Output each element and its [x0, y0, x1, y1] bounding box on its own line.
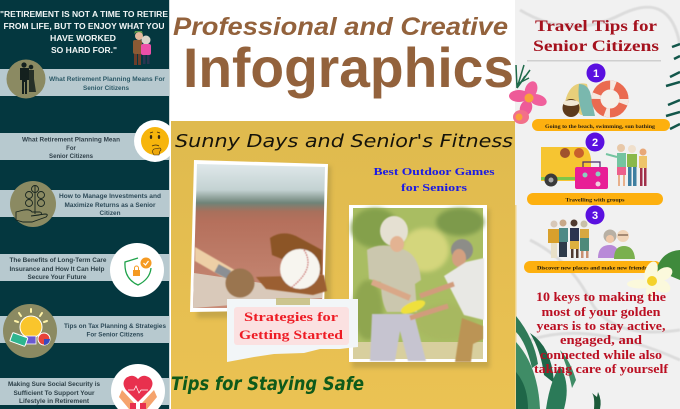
quote heading	[0, 9, 168, 55]
text block: golden years: most of your golden	[542, 305, 661, 319]
icon: heart in hands	[111, 364, 165, 409]
band 2	[0, 133, 169, 160]
text block: golden years: taking care of yourself	[534, 362, 669, 376]
panel: seniors fitness	[171, 121, 515, 409]
band 4	[0, 254, 169, 281]
callout: strategies	[227, 298, 358, 362]
callout: strategies: Strategies for	[244, 310, 339, 324]
band 1: What Retirement Planning Means For	[49, 77, 166, 83]
heading: sunny days: Sunny Days and Senior's Fitness	[175, 131, 513, 152]
text block: golden years: years is to stay active,	[536, 319, 666, 333]
step 2 badge: 2	[592, 137, 598, 149]
heading: travel tips: Travel Tips for	[535, 18, 657, 35]
flower left	[509, 65, 548, 124]
band 2: Senior Citizens	[49, 154, 94, 160]
step 2 badge	[586, 132, 604, 152]
icon: plumeria and leaf	[627, 250, 680, 299]
step 1 badge: 1	[593, 68, 599, 80]
step 3 badge: 3	[592, 210, 598, 222]
band 6: Sufficient To Support Your	[14, 391, 95, 397]
label: step 1	[532, 119, 670, 131]
icon: couple walking	[6, 60, 46, 98]
band 5: For Senior Citizens	[86, 332, 144, 338]
icon: waving couple	[598, 230, 635, 259]
quote heading: "RETIREMENT IS NOT A TIME TO RETIRE	[0, 9, 168, 19]
label: step 2	[527, 193, 663, 205]
band 1: Senior Citizens	[83, 86, 130, 92]
photo: seniors with frisbee	[349, 205, 490, 368]
palm leaf right top	[666, 44, 680, 129]
label: step 3	[524, 261, 661, 273]
band 3	[0, 190, 169, 217]
label: step 3: Discover new places and make new friends	[537, 266, 647, 272]
band 6: Lifestyle in Retirement	[19, 399, 89, 405]
quote heading: FROM LIFE, BUT TO ENJOY WHAT YOU	[4, 21, 164, 31]
band 2: For	[66, 146, 76, 152]
icon: investment plant in hand	[10, 181, 56, 227]
text block: golden years: engaged, and	[560, 333, 642, 347]
label: step 2: Travelling with groups	[566, 198, 624, 204]
panel: retirement planning	[0, 0, 176, 409]
band 2: What Retirement Planning Mean	[22, 138, 120, 144]
callout: strategies: Getting Started	[239, 328, 343, 342]
band 4: The Benefits of Long-Term Care	[10, 258, 107, 264]
icon: elderly couple	[133, 31, 151, 65]
icon: tax lightbulb	[3, 304, 57, 358]
label: step 1: Going to the beach, swimming, sun bathing	[545, 124, 655, 130]
label: best outdoor games: Best Outdoor Games	[374, 166, 495, 178]
icon: beach items	[562, 83, 624, 117]
step 3 badge	[586, 206, 604, 224]
band 1	[0, 69, 169, 96]
icon: group of four seniors	[548, 220, 589, 258]
heading: professional and creative: Professional and Creative	[173, 13, 508, 41]
band 4: Insurance and How It Can Help	[10, 267, 105, 273]
quote heading: SO HARD FOR."	[51, 45, 117, 55]
icon: group of three seniors	[606, 144, 647, 186]
band 5	[0, 316, 169, 343]
band 3: How to Manage Investments and	[59, 194, 161, 200]
heading: travel tips: Senior Citizens	[533, 38, 659, 55]
text block: golden years: connected while also	[540, 348, 662, 362]
heading: tips for staying safe: Tips for Staying Safe	[171, 373, 364, 395]
step 1 badge	[586, 64, 606, 82]
heading: infographics: Infographics	[183, 36, 514, 99]
band 6	[0, 378, 169, 405]
photo: baseball	[190, 160, 331, 318]
label: best outdoor games: for Seniors	[401, 182, 468, 194]
band 3: Maximize Returns as a Senior	[64, 203, 156, 209]
panel: title area	[170, 0, 515, 121]
icon: bus and suitcase	[541, 147, 608, 189]
panel: travel tips	[509, 0, 680, 409]
band 3: Citizen	[100, 211, 121, 217]
icon: security shield	[110, 243, 164, 297]
text block: golden years: 10 keys to making the	[536, 290, 667, 304]
quote heading: HAVE WORKED	[50, 33, 116, 43]
icon: thinking face	[134, 120, 176, 162]
band 5: Tips on Tax Planning & Strategies	[64, 324, 167, 330]
band 4: Secure Your Future	[28, 275, 87, 281]
leaf: bottom left	[516, 316, 601, 409]
band 6: Making Sure Social Security is	[8, 382, 101, 388]
